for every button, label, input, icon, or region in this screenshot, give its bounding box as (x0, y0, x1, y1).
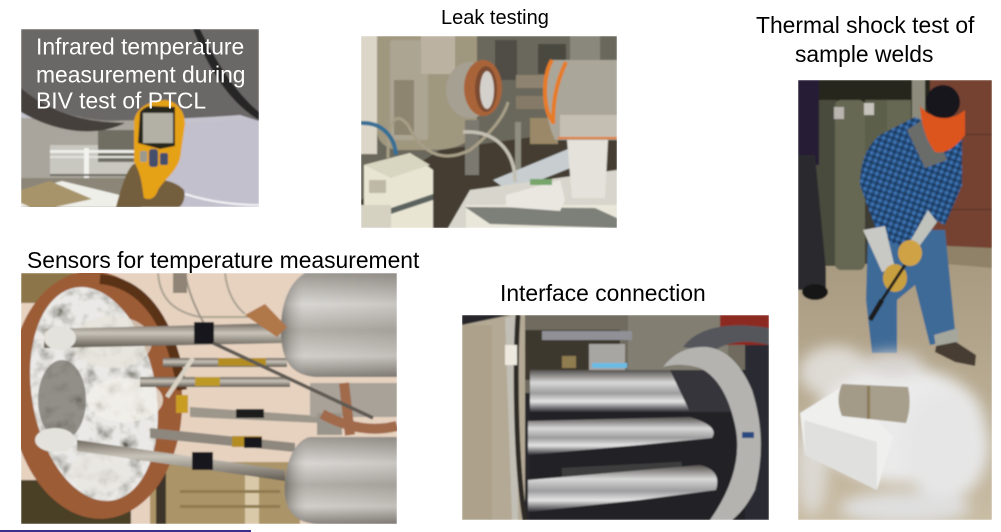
heading: thermal shock test (756, 12, 975, 67)
concrete floor (798, 264, 992, 520)
support column (567, 140, 608, 198)
photo: sensors for temperature measurement (2, 265, 397, 525)
fog cloud (796, 346, 989, 524)
back wall lines (156, 273, 249, 318)
lower left plant background (21, 118, 141, 208)
lower background (150, 462, 300, 524)
heading: leak testing: Leak testing (441, 7, 549, 29)
copper braid (322, 383, 397, 435)
top tank (281, 273, 397, 377)
rust wall (925, 80, 992, 268)
workshop background (520, 315, 769, 393)
heading: thermal shock test: sample welds (795, 41, 933, 67)
flange ring at far end (663, 325, 769, 520)
orange visor (920, 106, 965, 152)
yellow thermometer (134, 100, 185, 199)
white table (448, 170, 617, 228)
yellow gloves (883, 240, 922, 292)
diagonal probe (213, 343, 373, 418)
dark corners behind ring (21, 273, 76, 304)
black and gold sensor wraps (176, 322, 266, 470)
floor (361, 137, 617, 228)
lower tank (285, 437, 397, 524)
vacuum hoses (388, 102, 508, 158)
hair (926, 85, 960, 119)
pale tank wall (165, 118, 259, 207)
display (138, 106, 175, 149)
dark vessel interior (530, 370, 769, 520)
diagonal white beam (492, 148, 570, 186)
caption: infrared: BIV test of PTCL (36, 88, 206, 114)
photo: leak testing (361, 36, 617, 228)
heading: interface connection: Interface connection (500, 280, 706, 306)
person at lower left (361, 205, 391, 228)
heading: thermal shock test: Thermal shock test of (756, 12, 975, 38)
back wall windows (495, 40, 517, 80)
face shield (907, 115, 947, 168)
photo: interface connection (462, 315, 769, 520)
caption: infrared: measurement during (36, 62, 246, 88)
caption: infrared: Infrared temperature (36, 34, 244, 60)
caption: infrared (38, 38, 244, 108)
grey leather sleeves (863, 210, 937, 272)
small angled probe (167, 358, 193, 397)
foil interior (28, 286, 164, 502)
grey pipe overhead (21, 29, 259, 121)
gas cylinders (812, 80, 930, 270)
weld sample cylinder (838, 384, 910, 423)
middle pipes (516, 75, 546, 88)
rods (35, 323, 320, 481)
person at left edge (798, 80, 828, 300)
photo: infrared temperature measurement (21, 29, 259, 208)
wooden board on white stand (21, 181, 132, 207)
hand (116, 163, 185, 207)
foam box (800, 385, 893, 490)
heading: sensors: Sensors for temperature measurement (27, 247, 420, 273)
copper ring (21, 273, 188, 520)
leak detector (large white) (364, 153, 433, 228)
blue hose (361, 123, 396, 155)
cork clamp (245, 304, 287, 337)
bright flange (505, 315, 518, 520)
buttons (140, 149, 168, 167)
outer cylinder wall (462, 315, 525, 520)
checked shirt (860, 117, 962, 250)
middle tank (310, 383, 397, 417)
large tank (377, 36, 477, 150)
boot (935, 342, 976, 366)
foil-wrapped tubes (528, 370, 745, 512)
tool handle (882, 265, 905, 300)
white wall at left (361, 36, 377, 154)
trousers (866, 230, 958, 353)
leak detector (small white) (506, 179, 565, 211)
bottom edge line (0, 530, 251, 532)
photo: thermal shock test of sample welds (796, 80, 992, 524)
tank bell and copper flange (446, 62, 480, 118)
clear cover with orange band (545, 60, 617, 140)
